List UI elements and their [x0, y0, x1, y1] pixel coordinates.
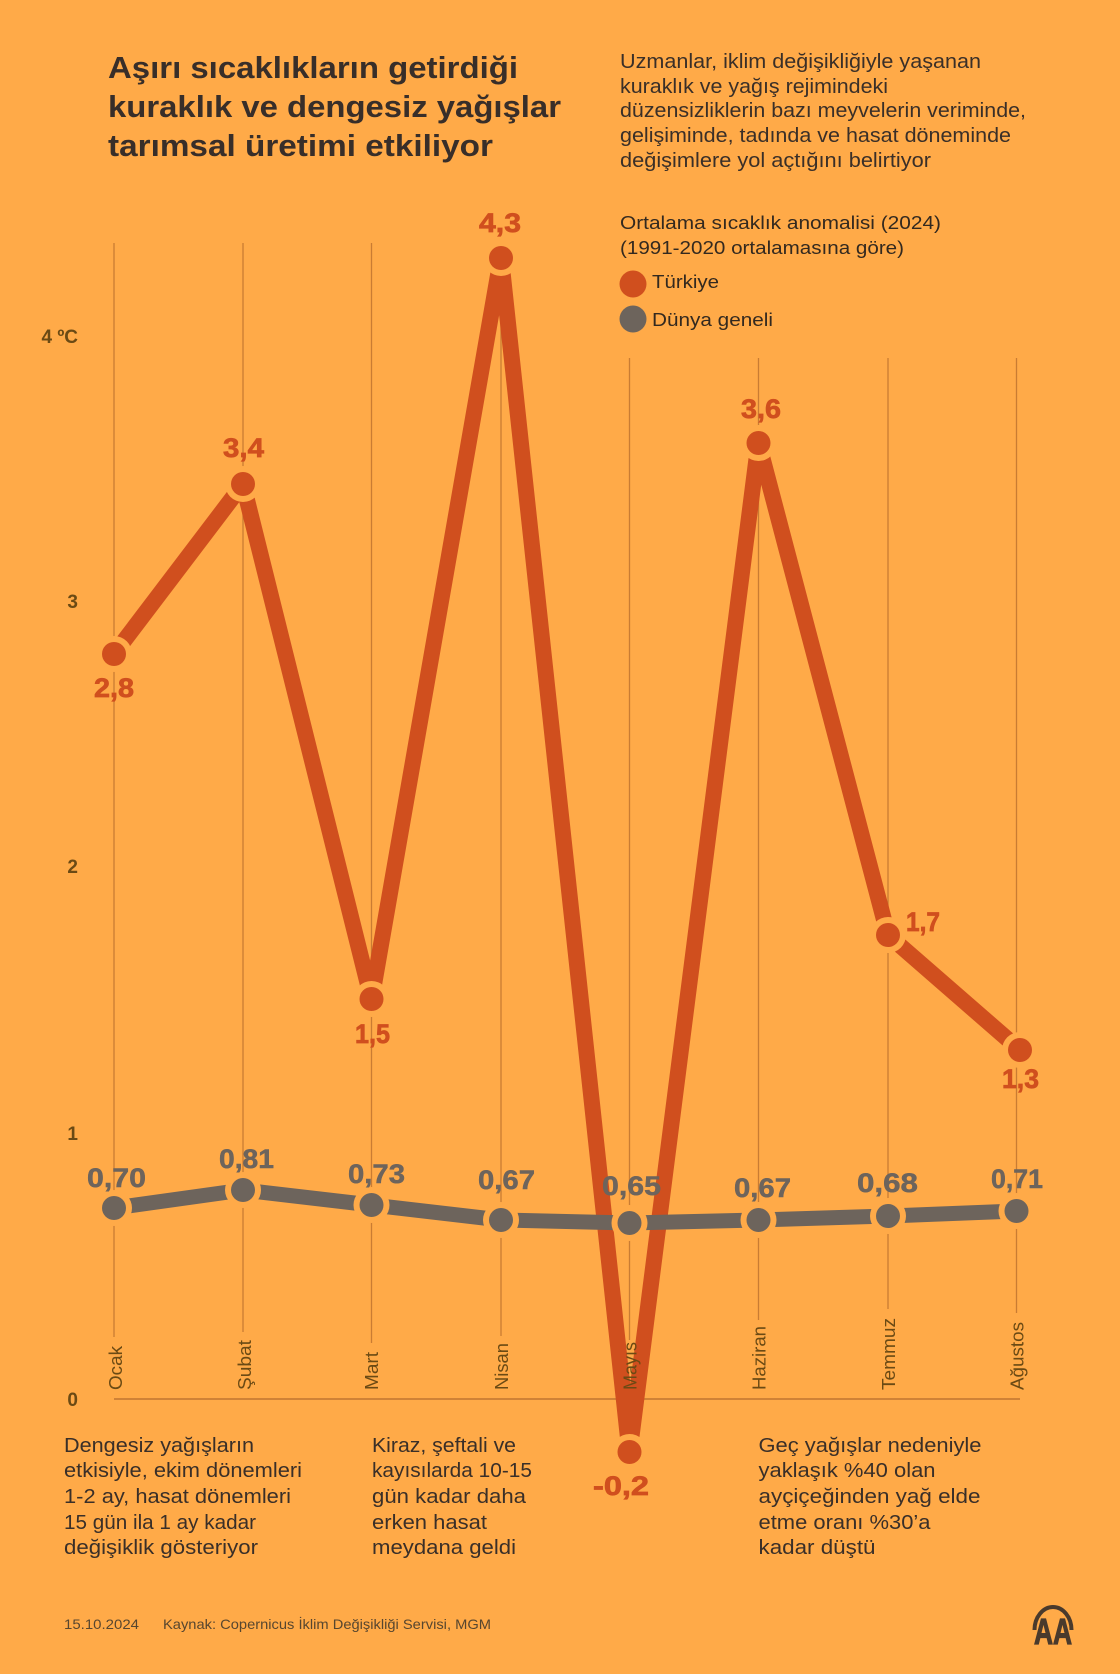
note: early harvest: kayısılarda 10-15 — [372, 1460, 532, 1482]
values: Türkiye — [94, 208, 1039, 1501]
month labels: Haziran — [750, 1326, 770, 1390]
note: early harvest: gün kadar daha — [372, 1486, 527, 1508]
note: sunflower: Geç yağışlar nedeniyle — [758, 1435, 982, 1457]
title: tarımsal üretimi etkiliyor — [108, 128, 493, 163]
intro text: değişimlere yol açtığını belirtiyor — [620, 150, 931, 172]
intro text: kuraklık ve yağış rejimindeki — [620, 76, 888, 98]
note: sowing and harvest: Dengesiz yağışların — [64, 1435, 254, 1457]
values: Dünya geneli: 0,71 — [991, 1164, 1043, 1194]
icon: AA logo — [1034, 1607, 1072, 1652]
chart month gridlines and axis — [114, 243, 1020, 1399]
values: Türkiye: 1,3 — [1002, 1064, 1039, 1094]
y axis labels: 2 — [67, 857, 78, 878]
footer source: Kaynak: Copernicus İklim Değişikliği Servisi, MGM — [163, 1615, 491, 1632]
y axis labels: 3 — [67, 592, 78, 613]
month labels: Nisan — [492, 1343, 512, 1390]
intro text: Uzmanlar, iklim değişikliğiyle yaşanan — [620, 51, 981, 73]
values: Türkiye: 4,3 — [479, 208, 521, 238]
month labels: Ocak — [106, 1345, 126, 1390]
note: sowing and harvest: 1-2 ay, hasat dönemleri — [64, 1486, 291, 1508]
month labels: Ağustos — [1008, 1322, 1028, 1390]
note: sunflower: yaklaşık %40 olan — [758, 1460, 936, 1482]
values: Dünya geneli — [87, 1144, 1043, 1203]
y axis labels: 4 ºC — [41, 327, 78, 348]
icon: AA logo: AA — [1034, 1611, 1072, 1652]
month labels: Temmuz — [879, 1318, 899, 1390]
values: Türkiye: 2,8 — [94, 673, 134, 703]
markers: Türkiye — [96, 240, 1038, 1470]
markers: Dünya geneli — [96, 1172, 1034, 1241]
month labels: Mayıs — [620, 1342, 640, 1390]
values: Dünya geneli: 0,67 — [478, 1165, 535, 1195]
values: Dünya geneli: 0,65 — [602, 1171, 661, 1201]
values: Dünya geneli: 0,68 — [857, 1168, 918, 1198]
legend: (1991-2020 ortalamasına göre) — [620, 238, 904, 258]
note: sowing and harvest — [64, 1435, 302, 1559]
values: Türkiye: 3,6 — [741, 394, 781, 424]
title: kuraklık ve dengesiz yağışlar — [108, 89, 561, 124]
note: early harvest: erken hasat — [372, 1512, 487, 1534]
note: sunflower: ayçiçeğinden yağ elde — [758, 1486, 980, 1508]
intro text — [620, 51, 1026, 172]
note: sowing and harvest: değişiklik gösteriyor — [64, 1537, 258, 1559]
y axis labels: 1 — [67, 1124, 78, 1145]
values: Dünya geneli: 0,81 — [219, 1144, 274, 1174]
note: early harvest — [372, 1435, 532, 1559]
values: Dünya geneli: 0,70 — [87, 1163, 146, 1193]
values: Türkiye: 1,5 — [355, 1019, 390, 1049]
values: Dünya geneli: 0,67 — [734, 1173, 791, 1203]
legend: Ortalama sıcaklık anomalisi (2024) — [620, 213, 941, 233]
note: sowing and harvest: 15 gün ila 1 ay kadar — [64, 1512, 256, 1534]
note: sunflower: kadar düştü — [758, 1537, 876, 1559]
legend — [620, 213, 941, 332]
title: Aşırı sıcaklıkların getirdiği — [108, 50, 518, 85]
month labels: Mart — [362, 1352, 382, 1390]
title — [108, 50, 561, 163]
legend: Dünya geneli — [652, 310, 773, 330]
values: Türkiye: -0,2 — [593, 1471, 649, 1501]
month labels — [106, 1318, 1028, 1390]
note: early harvest: meydana geldi — [372, 1537, 516, 1559]
y axis labels: 0 — [67, 1390, 78, 1411]
values: Türkiye: 1,7 — [906, 907, 940, 937]
values: Türkiye: 3,4 — [223, 433, 264, 463]
line: Türkiye — [114, 258, 1020, 1452]
note: sowing and harvest: etkisiyle, ekim dönemleri — [64, 1460, 302, 1482]
note: sunflower: etme oranı %30’a — [758, 1512, 931, 1534]
intro text: gelişiminde, tadında ve hasat döneminde — [620, 125, 1011, 147]
legend: Türkiye — [652, 272, 719, 292]
footer date: 15.10.2024 — [64, 1616, 139, 1632]
line: Dünya geneli — [114, 1190, 1016, 1223]
y axis labels — [41, 327, 78, 1411]
intro text: düzensizliklerin bazı meyvelerin veriminde, — [620, 100, 1026, 122]
note: sunflower — [758, 1435, 982, 1559]
note: early harvest: Kiraz, şeftali ve — [372, 1435, 516, 1457]
month labels: Şubat — [235, 1340, 255, 1390]
values: Dünya geneli: 0,73 — [348, 1159, 405, 1189]
